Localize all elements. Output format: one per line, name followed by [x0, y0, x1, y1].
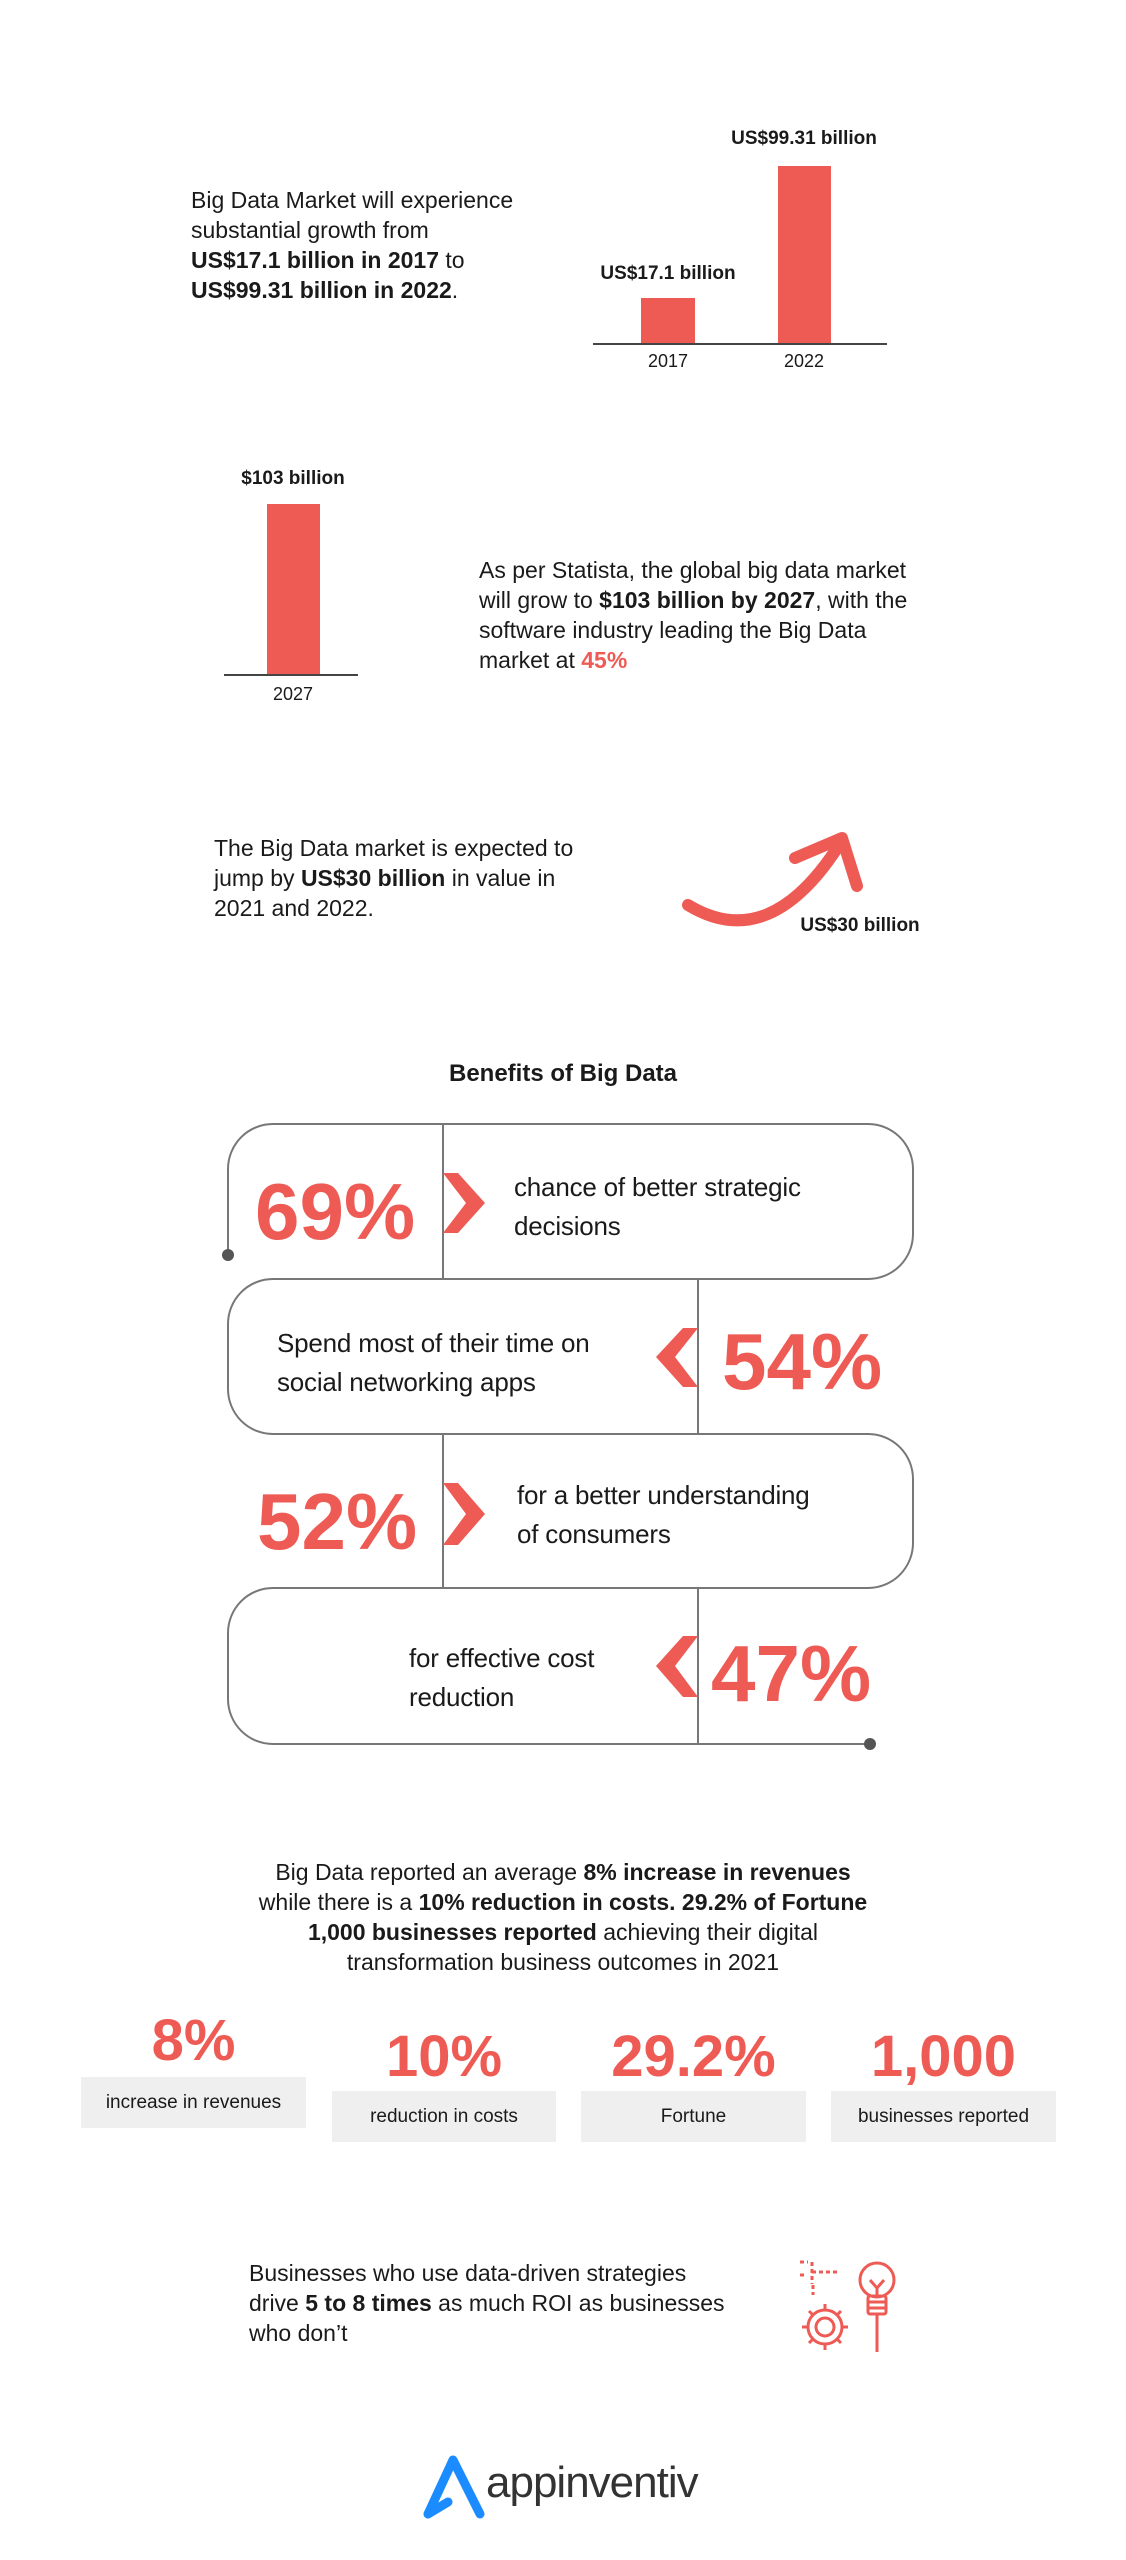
label: US$17.1 billion: US$17.1 billion — [600, 263, 736, 284]
icon: logo mark — [424, 2456, 484, 2518]
stat: 29.2%: 29.2% — [611, 2024, 776, 2089]
bar chart: 2017 vs 2022 — [593, 128, 887, 371]
text: market growth 2017-2022: US$99.31 billion in 2022. — [191, 277, 458, 303]
text: ROI: Businesses who use data-driven strategies — [249, 2260, 686, 2286]
text: market growth 2017-2022: US$17.1 billion in 2017 to — [191, 247, 465, 273]
stat: 10% — [332, 2024, 556, 2142]
stat: 10%: reduction in costs — [370, 2106, 518, 2126]
stat: 8%: increase in revenues — [106, 2092, 281, 2112]
text: social networking: Spend most of their time on — [277, 1328, 590, 1358]
icon: upward curved arrow — [682, 832, 863, 926]
text: revenue paragraph: Big Data reported an average 8% increase in revenues — [275, 1859, 851, 1885]
stat: 1,000: 1,000 — [871, 2024, 1016, 2089]
bar 2017 — [641, 298, 695, 344]
stat: 29.2%: Fortune — [661, 2106, 726, 2126]
text: Statista 2027: market at 45% — [479, 647, 627, 673]
text: social networking: social networking apps — [277, 1367, 536, 1397]
text: revenue paragraph: 1,000 businesses reported achieving their digital — [308, 1919, 818, 1945]
text: Statista 2027: As per Statista, the global big data market — [479, 557, 906, 583]
stat: 1,000: businesses reported — [858, 2106, 1029, 2126]
text: understanding consumers: of consumers — [517, 1519, 671, 1549]
text: market growth 2017-2022: Big Data Market will experience — [191, 187, 513, 213]
text: strategic decisions: chance of better strategic — [514, 1172, 801, 1202]
text: strategic decisions — [514, 1172, 801, 1241]
stat 54%: 54% — [722, 1317, 882, 1406]
text: understanding consumers — [517, 1480, 810, 1549]
text: revenue paragraph: while there is a 10% reduction in costs. 29.2% of Fortune — [259, 1889, 867, 1915]
label: US$30 billion: US$30 billion — [800, 915, 920, 936]
bar 2027 — [267, 504, 320, 675]
stat 69%: 69% — [255, 1167, 415, 1256]
text: US$30 billion jump: jump by US$30 billion in value in — [214, 865, 555, 891]
text: Statista 2027: will grow to $103 billion by 2027, with the — [479, 587, 907, 613]
heading: Benefits of Big Data: Benefits of Big Data — [449, 1060, 677, 1087]
text: understanding consumers: for a better understanding — [517, 1480, 810, 1510]
stat 47%: 47% — [711, 1629, 871, 1718]
text: cost reduction — [409, 1643, 594, 1712]
text: US$30 billion jump — [213, 835, 573, 921]
stat: 1,000 — [831, 2024, 1056, 2142]
panel: benefits serpentine — [222, 1123, 914, 1750]
logo text: appinventiv — [486, 2458, 698, 2507]
text: ROI: who don’t — [249, 2320, 347, 2346]
year labels: 2017 — [648, 351, 688, 371]
text: market growth 2017-2022: substantial growth from — [191, 217, 429, 243]
text: market growth 2017-2022 — [191, 187, 513, 303]
text: social networking — [277, 1328, 590, 1397]
stat: 29.2% — [581, 2024, 806, 2142]
text: Statista 2027: software industry leading the Big Data — [479, 617, 866, 643]
year label: 2027 — [273, 684, 313, 704]
text: cost reduction: for effective cost — [409, 1643, 594, 1673]
logo: appinventiv — [424, 2456, 698, 2518]
text: cost reduction: reduction — [409, 1682, 514, 1712]
stat 52%: 52% — [257, 1477, 417, 1566]
text: ROI: drive 5 to 8 times as much ROI as businesses — [249, 2290, 725, 2316]
text: revenue paragraph: transformation business outcomes in 2021 — [347, 1949, 779, 1975]
text: US$30 billion jump: The Big Data market is expected to — [214, 835, 573, 861]
label: $103 billion: $103 billion — [241, 468, 345, 489]
icon: gear and bulb — [800, 2260, 896, 2352]
text: US$30 billion jump: 2021 and 2022. — [214, 895, 374, 921]
text: Statista 2027 — [479, 557, 907, 673]
bar 2022 — [778, 166, 831, 344]
text: ROI — [249, 2260, 725, 2346]
bar chart: 2027 — [224, 468, 358, 704]
stat: 8% — [81, 2008, 306, 2128]
label: US$99.31 billion: US$99.31 billion — [731, 128, 877, 149]
bar chart: 2017 vs 2022: 2022 — [784, 351, 824, 371]
stat: 10%: 10% — [386, 2024, 502, 2089]
text: strategic decisions: decisions — [514, 1211, 621, 1241]
text: revenue paragraph — [258, 1859, 867, 1975]
stat: 8%: 8% — [152, 2008, 235, 2073]
